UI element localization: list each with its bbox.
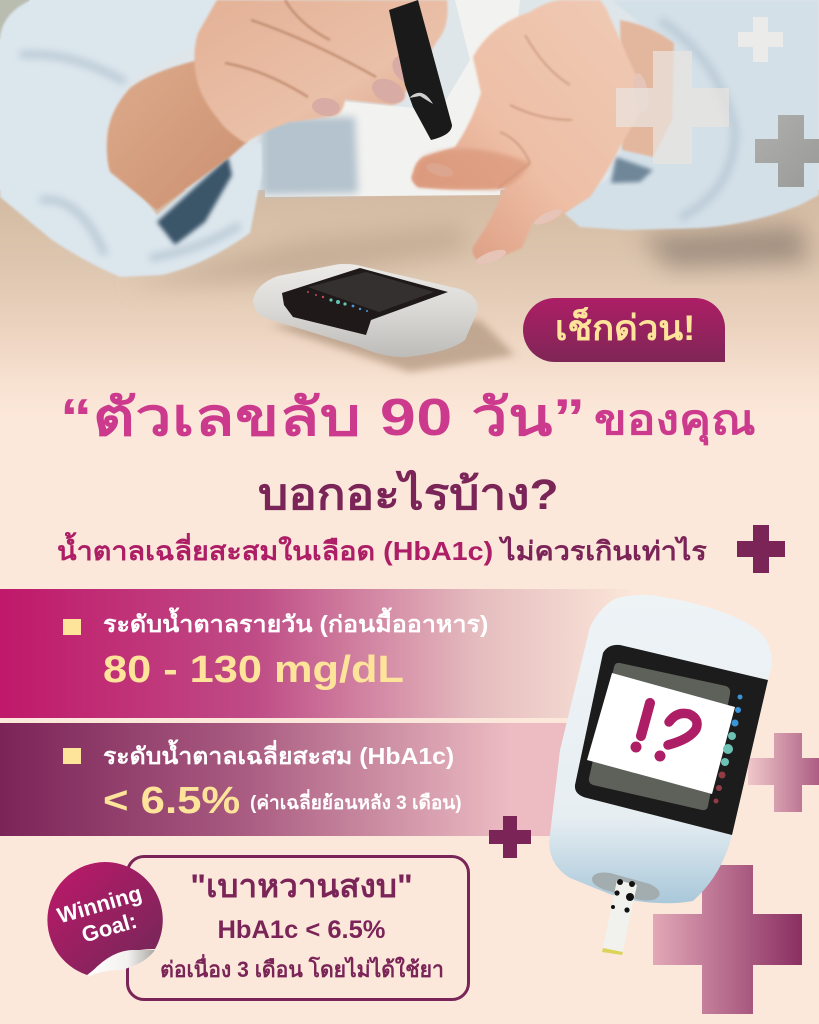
sticker text [54,880,151,952]
right hand with fingers [411,0,651,267]
nails right hand [425,72,651,267]
question and exclamation marks [630,703,697,762]
plus icon beside subtitle [737,525,785,573]
band value: < 6.5% [103,780,240,822]
band value: 80 - 130 mg/dL [103,649,404,691]
band label: ระดับน้ำตาลรายวัน (ก่อนมื้ออาหาร) [103,611,488,637]
band: HbA1c level [0,723,600,836]
band label: ระดับน้ำตาลเฉลี่ยสะสม (HbA1c) [103,743,454,769]
strip port [592,873,660,900]
sticker: winning goal [47,862,163,977]
title line 1 end: ของคุณ [594,397,756,443]
goal heading: "เบาหวานสงบ" [190,868,413,904]
band note: (ค่าเฉลี่ยย้อนหลัง 3 เดือน) [250,793,462,814]
meter body [549,595,772,903]
left sleeve [0,0,262,277]
white screen card [587,673,735,794]
small dark plus [489,816,531,858]
title line 2: บอกอะไรบ้าง? [258,471,559,519]
goal value: HbA1c < 6.5% [218,916,385,944]
medium plus right of meter [748,733,819,812]
badge: check now [523,298,725,362]
indicator lights [714,694,742,804]
translucent plus decorations over the photo [616,17,819,187]
lancet pen [389,0,452,140]
goal box [126,855,470,1001]
table shadows [125,225,810,372]
bullet square [63,748,81,764]
photo: hands testing blood sugar above a glucose meter on a table [0,0,819,386]
large plus bottom right [653,865,802,1014]
meter screen bezel [575,645,768,835]
left hand with fingers [194,0,448,143]
table and background [0,0,819,420]
bullet square [63,619,81,635]
plus: large [616,51,729,164]
sticker text: Winning [54,880,145,928]
subtitle: น้ำตาลเฉลี่ยสะสมในเลือด (HbA1c) ไม่ควรเกินเท่าไร [57,536,707,566]
sticker disc [47,862,163,975]
sticker curl [87,950,155,977]
nails left hand [311,48,429,118]
right sleeve [564,0,819,230]
illustrated glucose meter with question marks [549,595,772,955]
title line 1: “ตัวเลขลับ 90 วัน” [60,389,586,447]
test strip [602,879,637,955]
left forearm [107,60,247,210]
lcd panel [589,663,730,810]
band: daily sugar level [0,589,640,718]
right wrist [620,20,674,157]
goal condition: ต่อเนื่อง 3 เดือน โดยไม่ได้ใช้ยา [160,957,444,982]
plus: small top [738,17,783,62]
sticker text: Goal: [79,908,140,947]
plus: right grey [755,115,819,187]
badge text: เช็กด่วน! [555,309,695,348]
glucose meter on table [253,264,478,357]
